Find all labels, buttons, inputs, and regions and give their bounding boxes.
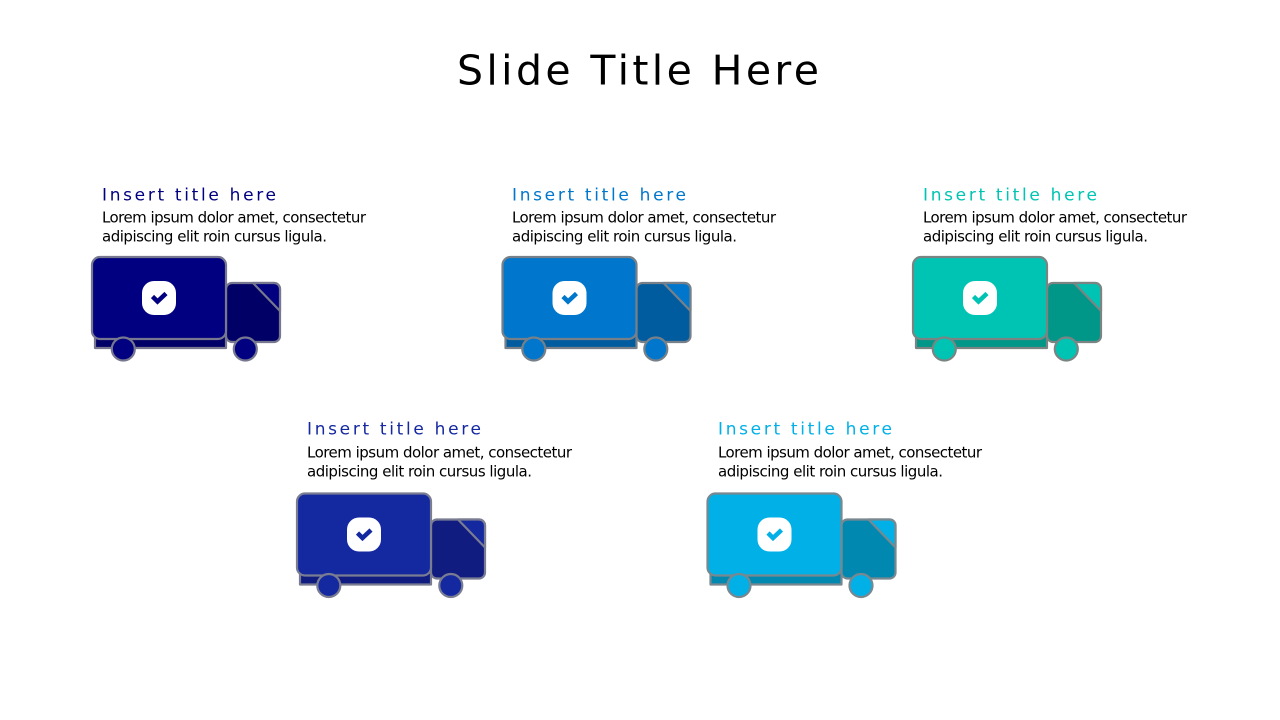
icon: truck 1 [92,257,280,360]
icon: truck 4 [297,494,485,597]
text block 1 [102,208,367,246]
text block 1: Lorem ipsum dolor amet, consectetur [102,208,367,226]
text block 2: Lorem ipsum dolor amet, consectetur [512,208,777,226]
text block 5: adipiscing elit roin cursus ligula. [718,462,943,480]
text block 4: Lorem ipsum dolor amet, consectetur [307,444,573,462]
text block 3: adipiscing elit roin cursus ligula. [923,228,1148,246]
panel: item 2 [502,186,777,360]
text block 1: adipiscing elit roin cursus ligula. [102,228,327,246]
text block 5: Lorem ipsum dolor amet, consectetur [718,444,983,462]
text block 2: adipiscing elit roin cursus ligula. [512,228,737,246]
title: Slide Title Here [457,46,819,94]
heading 1: Insert title here [102,186,276,206]
text block 3 [923,208,1188,246]
icon: truck 5 [708,494,896,597]
text block 3: Lorem ipsum dolor amet, consectetur [923,208,1188,226]
icon: truck 2 [502,257,690,360]
heading 4: Insert title here [307,420,481,440]
panel: item 1 [92,186,367,360]
text block 4 [307,444,573,480]
panel: item 3 [913,186,1188,360]
icon: truck 3 [913,257,1101,360]
text block 5 [718,444,983,480]
text block 2 [512,208,777,246]
heading 3: Insert title here [923,186,1097,206]
text block 4: adipiscing elit roin cursus ligula. [307,462,532,480]
panel: item 4 [297,420,573,597]
heading 5: Insert title here [718,420,892,440]
heading 2: Insert title here [512,186,686,206]
panel: item 5 [708,420,983,597]
